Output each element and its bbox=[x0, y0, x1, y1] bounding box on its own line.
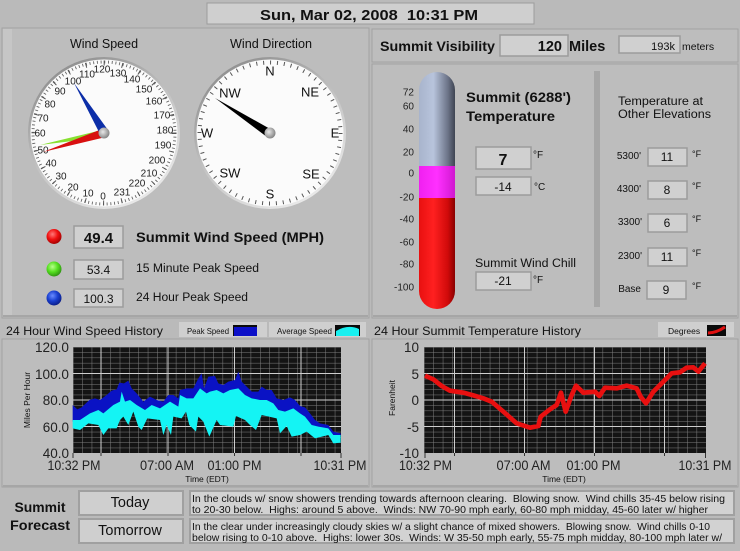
thermometer scale bbox=[394, 88, 414, 294]
button: today: Today bbox=[111, 495, 150, 511]
thermometer scale: -60 bbox=[400, 238, 414, 248]
elevation 4300: °F bbox=[692, 181, 702, 191]
elevation 4300 bbox=[617, 181, 702, 199]
panel: summit visibility: Miles bbox=[569, 39, 605, 55]
legend: degrees: Degrees bbox=[668, 326, 700, 336]
y axis labels bbox=[399, 340, 419, 461]
thermometer scale: 40 bbox=[403, 124, 414, 136]
speed scale labels: 30 bbox=[55, 172, 67, 182]
indicator: current wind speed: Summit Wind Speed (MPH) bbox=[136, 229, 324, 245]
elevation base: 9 bbox=[663, 283, 670, 297]
elevation base: Base bbox=[618, 284, 641, 295]
thermometer scale: -80 bbox=[400, 260, 414, 270]
panel: summit visibility: 193k bbox=[651, 41, 675, 53]
readout: wind chill: Summit Wind Chill bbox=[475, 258, 576, 270]
heading: summit forecast: Summit bbox=[14, 499, 66, 515]
button: tomorrow: Tomorrow bbox=[98, 523, 162, 539]
forecast text: tomorrow: In the clear under increasingly cloudy skies w/ a slight chance of mixed showers. Blowing snow. Wind chills 0-10 bbox=[192, 521, 710, 533]
legend: peak speed bbox=[179, 322, 267, 337]
thermometer scale: -100 bbox=[394, 282, 414, 294]
indicator: current wind speed bbox=[46, 226, 324, 248]
readout: fahrenheit bbox=[476, 147, 543, 169]
needle hub bbox=[264, 128, 276, 138]
elevation 5300: 5300' bbox=[617, 151, 641, 162]
elevation base: °F bbox=[692, 281, 702, 291]
speed scale labels: 50 bbox=[37, 146, 49, 156]
forecast text: today bbox=[190, 491, 734, 516]
readout: celsius: °C bbox=[534, 182, 545, 193]
compass labels: E bbox=[331, 126, 340, 140]
elevation 4300: 4300' bbox=[617, 184, 641, 195]
y axis labels: 5 bbox=[411, 367, 419, 382]
legend: average speed: Average Speed bbox=[277, 326, 332, 336]
elevation 3300: °F bbox=[692, 214, 702, 224]
elevation 2300 bbox=[618, 248, 702, 266]
heading: wind history: 24 Hour Wind Speed History bbox=[6, 324, 163, 338]
elevation 4300: 8 bbox=[664, 183, 671, 197]
thermometer scale: -20 bbox=[400, 192, 414, 204]
panel: temperature history chart bbox=[372, 339, 738, 487]
speed scale labels: 231 bbox=[114, 188, 131, 198]
speed scale labels: 100 bbox=[65, 76, 82, 88]
speed scale labels: 40 bbox=[45, 158, 57, 170]
heading: summit temperature: Summit (6288') bbox=[466, 89, 571, 105]
y axis labels: 120.0 bbox=[35, 340, 69, 355]
speed scale labels: 180 bbox=[157, 126, 174, 136]
x axis ticks bbox=[73, 453, 341, 458]
compass labels: SW bbox=[220, 166, 241, 180]
speed scale labels: 110 bbox=[79, 70, 95, 80]
elevation 5300: °F bbox=[692, 149, 702, 159]
peak speed area bbox=[73, 372, 341, 443]
y axis labels: 10 bbox=[404, 340, 419, 355]
speed scale labels: 160 bbox=[146, 96, 163, 108]
readout: fahrenheit: 7 bbox=[499, 152, 508, 169]
button: tomorrow bbox=[79, 519, 183, 543]
speed scale labels: 170 bbox=[154, 110, 171, 122]
compass labels: NW bbox=[219, 86, 242, 100]
heading: temperature history: 24 Hour Summit Temperature History bbox=[374, 324, 581, 338]
speed scale labels: 200 bbox=[149, 156, 166, 166]
y axis labels: 60.0 bbox=[43, 420, 69, 435]
compass labels bbox=[201, 64, 340, 202]
elevation 2300: °F bbox=[692, 248, 702, 258]
speed scale labels: 150 bbox=[136, 84, 153, 96]
readout: wind chill bbox=[475, 258, 576, 290]
plot grid bbox=[73, 347, 341, 453]
y axis labels: 0 bbox=[411, 393, 419, 408]
panel: summit visibility: meters bbox=[682, 41, 714, 53]
needle hub bbox=[98, 128, 110, 138]
compass labels: W bbox=[201, 126, 214, 140]
legend: average speed bbox=[269, 322, 366, 337]
readout: fahrenheit: °F bbox=[533, 150, 543, 161]
elevation base bbox=[618, 281, 702, 299]
panel: summit visibility: Summit Visibility bbox=[380, 39, 496, 54]
needle: 15 minute peak bbox=[40, 130, 105, 145]
needle: 24 hour peak bbox=[74, 83, 108, 134]
elevation 3300: 6 bbox=[664, 216, 671, 230]
forecast text: today: to 20-30 below. Highs: around 5 above. Winds: NW 70-90 mph early, 60-80 mph midday, 45-60 later w/ higher bbox=[192, 504, 709, 516]
speed scale labels: 130 bbox=[110, 68, 127, 80]
x axis labels: 01:00 PM bbox=[566, 458, 620, 473]
thermometer scale: -40 bbox=[400, 214, 414, 226]
heading: summit temperature bbox=[466, 89, 571, 124]
speed scale labels: 220 bbox=[129, 178, 146, 190]
elevation 5300: 11 bbox=[661, 150, 674, 164]
x axis labels: 10:32 PM bbox=[399, 458, 452, 473]
x axis labels: 07:00 AM bbox=[140, 458, 194, 473]
legend: peak speed: Peak Speed bbox=[187, 326, 229, 336]
gauge: wind speed bbox=[28, 57, 180, 209]
heading: summit forecast: Forecast bbox=[10, 517, 70, 533]
forecast text: tomorrow bbox=[190, 519, 734, 544]
elevation 2300: 2300' bbox=[618, 251, 642, 262]
speed scale labels: 70 bbox=[37, 114, 49, 124]
date and time banner: Sun, Mar 02, 2008 10:31 PM bbox=[260, 8, 478, 24]
heading: wind direction: Wind Direction bbox=[230, 37, 312, 51]
panel: wind gauges and speeds bbox=[2, 28, 369, 318]
speed scale labels: 210 bbox=[141, 168, 158, 180]
panel: summit visibility: 120 bbox=[538, 39, 562, 55]
indicator: 24 hour peak bbox=[46, 289, 248, 307]
heading: summit forecast bbox=[10, 499, 70, 533]
x axis title: Time (EDT) bbox=[185, 474, 229, 484]
x axis labels: 01:00 PM bbox=[208, 458, 262, 473]
speed scale labels: 20 bbox=[67, 182, 79, 194]
compass labels: S bbox=[266, 186, 275, 202]
elevation 3300: 3300' bbox=[618, 217, 642, 228]
speed scale labels: 190 bbox=[155, 140, 172, 152]
indicator: 15 minute peak bbox=[46, 260, 259, 279]
y axis labels: 100.0 bbox=[35, 367, 69, 382]
speed scale labels: 10 bbox=[82, 188, 94, 200]
x axis labels bbox=[399, 458, 732, 473]
y axis labels: 80.0 bbox=[43, 393, 69, 408]
y axis labels: -10 bbox=[399, 446, 419, 461]
forecast text: today: In the clouds w/ snow showers trending towards afternoon clearing. Blowing snow. Wind chills 35-45 below rising bbox=[192, 493, 725, 505]
thermometer scale: 20 bbox=[403, 148, 414, 158]
thermometer bbox=[419, 72, 455, 309]
indicator: 24 hour peak: 100.3 bbox=[83, 292, 114, 306]
readout: celsius bbox=[476, 177, 545, 195]
x axis labels: 10:32 PM bbox=[48, 458, 100, 473]
temperature line bbox=[425, 363, 705, 428]
elevation 2300: 11 bbox=[661, 250, 674, 264]
y axis title: Farenheit bbox=[387, 379, 397, 416]
heading: other elevations bbox=[618, 96, 711, 121]
x axis labels bbox=[48, 458, 366, 473]
indicator: current wind speed: 49.4 bbox=[84, 230, 114, 247]
average speed area bbox=[73, 388, 341, 443]
readout: wind chill: -21 bbox=[494, 274, 512, 288]
compass labels: SE bbox=[302, 166, 320, 182]
forecast text: tomorrow: below rising to 0-10 above. Highs: lower 30s. Winds: W 35-50 mph early, 55-75 mph midday, 80-100 mph later w/ bbox=[192, 532, 722, 544]
elevation 5300 bbox=[617, 148, 702, 166]
speed scale labels: 0 bbox=[100, 192, 106, 202]
compass labels: NE bbox=[301, 84, 319, 100]
indicator: 15 minute peak: 53.4 bbox=[87, 263, 111, 277]
thermometer scale: 60 bbox=[403, 102, 414, 112]
x axis labels: 10:31 PM bbox=[314, 458, 366, 473]
gauge: wind direction bbox=[194, 57, 346, 209]
indicator: 15 minute peak: 15 Minute Peak Speed bbox=[136, 263, 259, 275]
heading: summit temperature: Temperature bbox=[466, 108, 555, 124]
date and time banner bbox=[207, 3, 534, 24]
y axis title: Miles Per Hour bbox=[22, 372, 32, 428]
indicator: 24 hour peak: 24 Hour Peak Speed bbox=[136, 292, 248, 304]
y axis labels bbox=[35, 340, 69, 461]
readout: wind chill: °F bbox=[533, 275, 543, 286]
speed scale labels: 60 bbox=[34, 128, 46, 140]
x axis labels: 07:00 AM bbox=[496, 458, 550, 473]
speed scale labels: 140 bbox=[124, 74, 141, 86]
y axis labels: 40.0 bbox=[43, 446, 69, 461]
thermometer scale: 0 bbox=[408, 168, 414, 180]
panel: temperature bbox=[372, 64, 738, 318]
legend: degrees bbox=[658, 322, 734, 337]
x axis labels: 10:31 PM bbox=[678, 458, 732, 473]
plot grid bbox=[424, 347, 706, 453]
speed scale labels bbox=[34, 64, 174, 202]
y axis labels: -5 bbox=[407, 420, 419, 435]
speed scale labels: 120 bbox=[94, 64, 111, 76]
x axis title: Time (EDT) bbox=[542, 474, 586, 484]
compass labels: N bbox=[265, 64, 275, 78]
heading: other elevations: Temperature at bbox=[618, 96, 704, 108]
thermometer scale: 72 bbox=[403, 88, 414, 98]
elevation 3300 bbox=[618, 214, 702, 232]
readout: celsius: -14 bbox=[494, 180, 512, 194]
heading: other elevations: Other Elevations bbox=[618, 109, 711, 121]
panel: wind speed history chart bbox=[2, 339, 369, 487]
speed scale labels: 80 bbox=[44, 100, 56, 110]
speed scale labels: 90 bbox=[54, 86, 66, 98]
heading: wind speed: Wind Speed bbox=[70, 37, 138, 51]
x axis ticks bbox=[425, 453, 706, 458]
divider bbox=[594, 71, 600, 307]
needle: direction bbox=[215, 98, 272, 137]
needle: current speed bbox=[43, 129, 106, 152]
panel: summit visibility bbox=[372, 29, 738, 62]
button: today bbox=[79, 491, 183, 515]
